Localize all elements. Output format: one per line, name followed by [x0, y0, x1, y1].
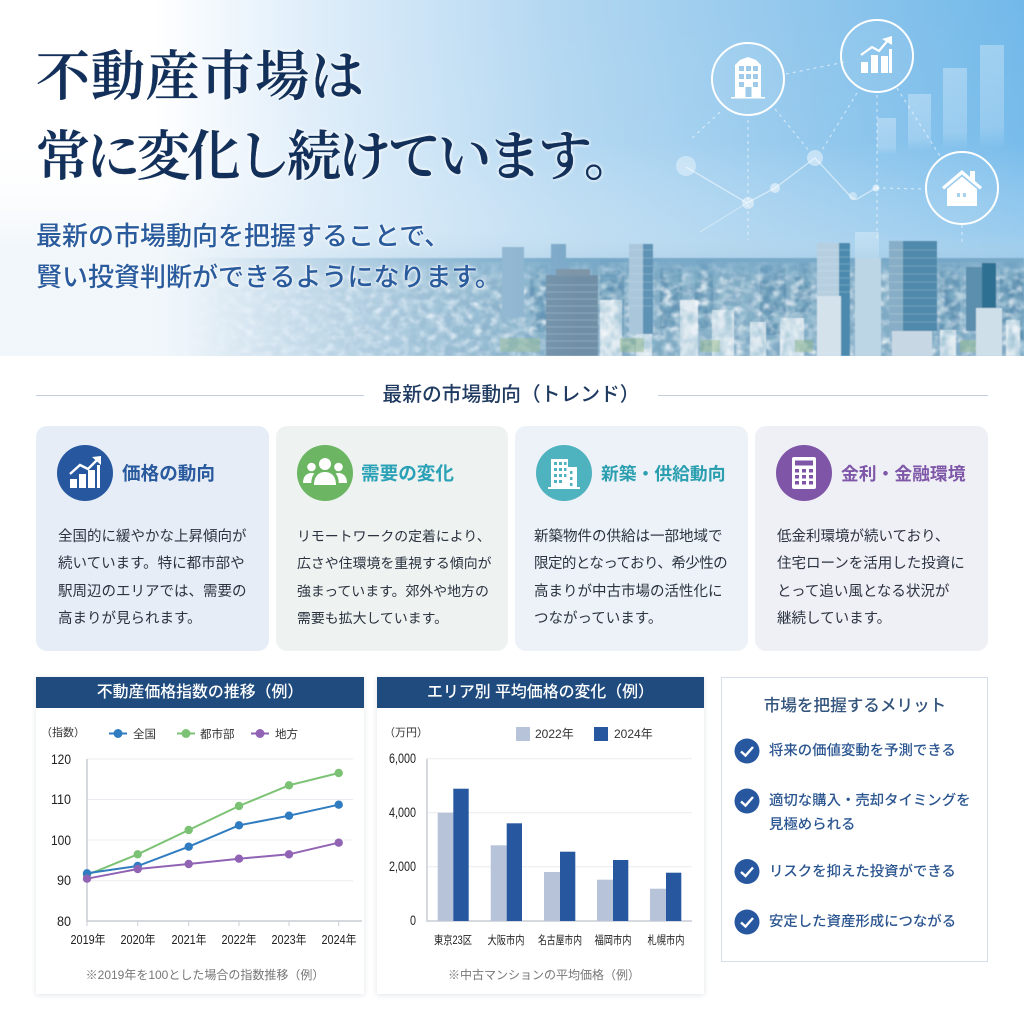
footnote: ※中古マンションの平均価格（例） [448, 967, 640, 982]
body text: つながっています。 [534, 611, 662, 627]
body text: 継続しています。 [777, 611, 891, 627]
hero background illustration: sky, skyline and network [0, 0, 1024, 356]
panel: merits [721, 677, 988, 962]
x axis labels: 2020年 [120, 933, 156, 947]
heading: 価格の動向 [122, 463, 215, 484]
merit 4: 安定した資産形成につながる [769, 914, 956, 930]
legend [109, 727, 298, 741]
hero banner [0, 0, 1024, 356]
panel: line chart card [36, 677, 364, 994]
y axis labels: 2,000 [389, 859, 416, 874]
x axis labels: 2024年 [322, 933, 356, 947]
y axis labels [389, 751, 416, 928]
skyline [212, 240, 1024, 356]
body text: リモートワークの定着により、 [297, 528, 491, 544]
series: national [83, 800, 343, 878]
y axis labels: 90 [57, 872, 71, 888]
legend: 都市部 [200, 728, 235, 741]
body text: 住宅ローンを活用した投資に [777, 556, 965, 572]
body text [58, 528, 246, 627]
x axis labels: 2022年 [222, 933, 256, 947]
bar chart title: エリア別 平均価格の変化（例） [427, 684, 654, 701]
body text: 広さや住環境を重視する傾向が [297, 555, 491, 571]
bar chart [384, 726, 692, 982]
tower windows [546, 250, 937, 348]
panel: price trend [36, 426, 269, 651]
line chart title [36, 677, 364, 708]
heading: 需要の変化 [361, 463, 454, 484]
icon: rising chart in circle [841, 20, 913, 92]
icon: house in circle [926, 152, 998, 224]
icon: buildings [536, 445, 592, 501]
hero subtitle: 最新の市場動向を把握することで、 [36, 221, 450, 251]
y axis labels: 0 [410, 913, 416, 928]
body text: 強まっています。郊外や地方の [297, 583, 489, 599]
bars 2022 [438, 813, 666, 921]
y axis labels: 6,000 [389, 751, 416, 766]
footnote: ※2019年を100とした場合の指数推移（例） [86, 967, 324, 982]
icon: building in circle [712, 43, 784, 115]
body text: 続いています。特に都市部や [58, 556, 245, 572]
x axis labels: 福岡市内 [594, 933, 632, 947]
body text: とって追い風となる状況が [777, 584, 949, 600]
x axis labels: 札幌市内 [648, 933, 684, 947]
icon: rising chart [57, 445, 113, 501]
x axis labels: 名古屋市内 [538, 933, 582, 947]
body text [297, 528, 492, 626]
merit 2: 適切な購入・売却タイミングを [769, 793, 970, 809]
hero title: 常に変化し続けています。 [36, 127, 634, 187]
legend: 地方 [275, 727, 298, 741]
series: urban [83, 769, 343, 879]
body text: 全国的に緩やかな上昇傾向が [58, 529, 246, 545]
bars 2024 [453, 789, 681, 921]
heading: 金利・金融環境 [841, 464, 965, 484]
legend: 全国 [133, 727, 156, 741]
icon: calculator [776, 445, 832, 501]
body text [777, 528, 965, 627]
body text: 需要も拡大しています。 [297, 610, 448, 626]
body text: 高まりが中古市場の活性化に [534, 584, 722, 600]
y axis labels [51, 751, 71, 929]
panel: new supply [515, 426, 748, 651]
hero subtitle [36, 221, 501, 292]
legend: 2022年 [535, 727, 574, 741]
merit 3: リスクを抑えた投資ができる [769, 864, 956, 880]
y axis labels: 110 [51, 791, 71, 807]
towers [502, 241, 1002, 356]
x axis labels: 2019年 [70, 933, 106, 947]
legend: 2024年 [614, 727, 653, 741]
axis unit: （指数） [41, 725, 85, 739]
x axis labels [70, 933, 356, 947]
translucent bar graph [855, 45, 1004, 268]
x axis labels: 大阪市内 [488, 933, 524, 947]
series: regional [83, 838, 343, 883]
network lines [686, 62, 962, 245]
panel: interest rates [755, 426, 988, 651]
merit 1: 将来の価値変動を予測できる [769, 743, 956, 759]
merits title: 市場を把握するメリット [764, 696, 946, 715]
line chart title: 不動産価格指数の推移（例） [97, 684, 303, 701]
axis unit: （万円） [384, 726, 428, 739]
y axis labels: 100 [51, 832, 71, 848]
panel: bar chart card [377, 677, 704, 994]
body text [534, 528, 727, 627]
body text: 高まりが見られます。 [58, 611, 202, 627]
body text: 低金利環境が続いており、 [777, 529, 950, 545]
body text: 限定的となっており、希少性の [534, 556, 727, 572]
icon: people [297, 445, 353, 501]
panel: demand change [276, 426, 508, 651]
x axis labels: 東京23区 [434, 934, 472, 947]
x axis labels: 2023年 [272, 933, 306, 947]
merit 2 [769, 792, 970, 833]
x axis labels [434, 933, 684, 947]
hero title [36, 47, 634, 187]
heading: 新築・供給動向 [601, 464, 725, 484]
line chart [41, 725, 362, 982]
legend [516, 727, 653, 741]
y axis labels: 120 [51, 751, 71, 767]
check icons [734, 738, 760, 934]
body text: 駅周辺のエリアでは、需要の [58, 584, 246, 600]
x axis labels: 2021年 [172, 933, 206, 947]
y axis labels: 80 [57, 913, 71, 929]
bar chart title [377, 677, 704, 708]
section heading: 最新の市場動向（トレンド） [382, 384, 640, 406]
merit 2: 見極められる [769, 817, 855, 833]
body text: 新築物件の供給は一部地域で [534, 529, 722, 545]
y axis labels: 4,000 [389, 805, 416, 820]
network nodes [676, 150, 880, 209]
hero title: 不動産市場は [36, 47, 365, 107]
hero subtitle: 賢い投資判断ができるようになります。 [36, 262, 501, 292]
